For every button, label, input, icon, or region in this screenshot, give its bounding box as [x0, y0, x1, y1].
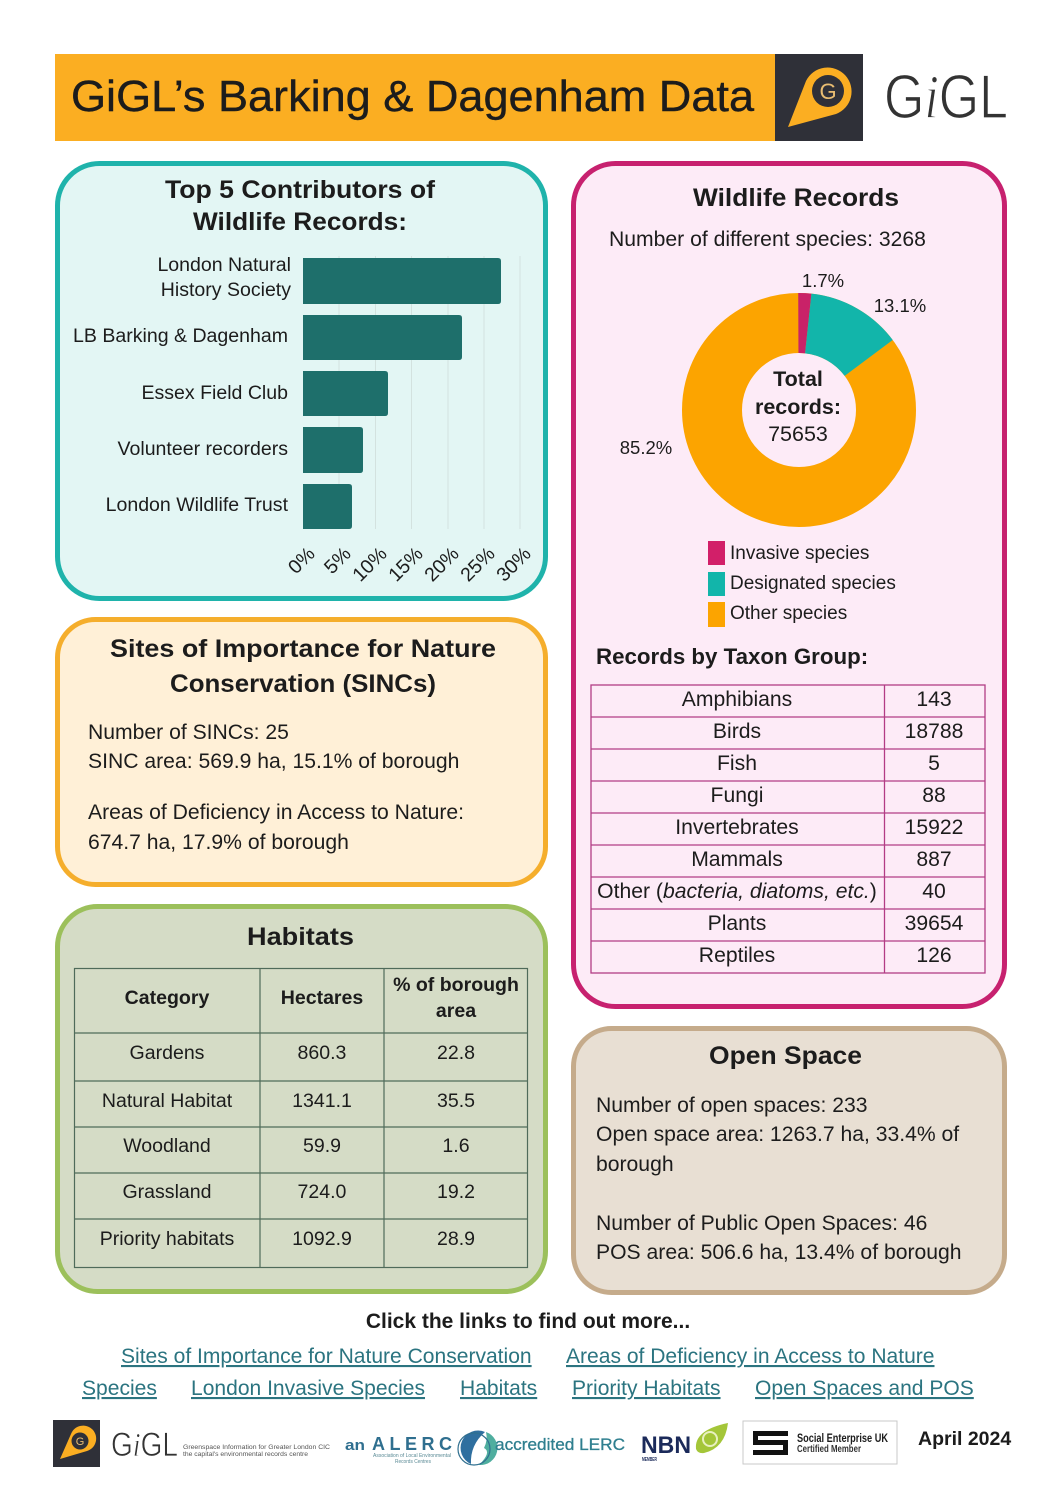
bar chart: contributors [73, 254, 536, 586]
logo: GiGL footer: G [76, 1436, 84, 1448]
panel: wildlife records [574, 164, 1004, 1006]
text: number of species: Number of different species: 3268 [609, 228, 926, 251]
text: SINC statistics [88, 721, 464, 854]
heading: SINCs: Conservation (SINCs) [170, 670, 436, 698]
bar chart: contributors: 20% [420, 543, 464, 586]
donut chart: records by species type: 13.1% [874, 295, 926, 316]
table: habitats: Hectares [281, 987, 363, 1009]
text: SINC statistics: SINC area: 569.9 ha, 15.1% of borough [88, 750, 459, 773]
logo: GiGL pin icon: G [819, 79, 837, 104]
bar chart: contributors: 5% [320, 543, 356, 579]
table: habitats: 19.2 [437, 1181, 475, 1203]
logo: Social Enterprise UK: Social Enterprise UK [797, 1431, 888, 1445]
links: Sites of Importance for Nature Conservation [121, 1345, 532, 1368]
bar chart: contributors: LB Barking & Dagenham [73, 325, 288, 347]
links: Species [82, 1377, 157, 1400]
panel: open space [574, 1028, 1004, 1292]
bar chart: contributors: 10% [348, 543, 392, 586]
table: taxon group records: 88 [922, 784, 946, 807]
logo: ALERC accredited LERC: Records Centres [395, 1459, 431, 1465]
heading: SINCs: Sites of Importance for Nature [110, 635, 496, 663]
legend: species types [708, 541, 896, 627]
logo: ALERC accredited LERC [345, 1431, 625, 1465]
footer logos [53, 1420, 897, 1467]
links: Priority Habitats [572, 1377, 721, 1400]
text: SINC statistics: Areas of Deficiency in Access to Nature: [88, 801, 464, 824]
legend: species types: Other species [730, 603, 847, 624]
table: taxon group records: 40 [922, 880, 946, 903]
heading: top 5 contributors: Top 5 Contributors of [165, 176, 436, 204]
table: habitats: 724.0 [298, 1181, 347, 1203]
table: taxon group records: 15922 [905, 816, 963, 839]
links: Habitats [460, 1377, 537, 1400]
table: taxon group records: 126 [916, 944, 952, 967]
logo: NBN member: NBN [641, 1432, 691, 1459]
bar chart: contributors: Volunteer recorders [118, 438, 288, 460]
table: habitats: Woodland [123, 1135, 211, 1157]
links heading: Click the links to find out more... [366, 1310, 690, 1333]
logo: GiGL pin icon [775, 54, 863, 141]
table: taxon group records [591, 685, 985, 973]
donut chart: records by species type: 1.7% [802, 270, 844, 291]
table: habitats: 35.5 [437, 1090, 475, 1112]
table: taxon group records: Fish [717, 752, 757, 775]
heading: top 5 contributors: Wildlife Records: [193, 208, 407, 236]
donut chart: records by species type: records: [755, 395, 841, 419]
bar chart: contributors: London Natural [157, 254, 291, 276]
table: habitats [74, 968, 528, 1268]
text: open space statistics: Number of Public Open Spaces: 46 [596, 1212, 927, 1235]
table: habitats: 860.3 [298, 1042, 346, 1064]
table: habitats: area [436, 1000, 476, 1022]
links: Open Spaces and POS [755, 1377, 974, 1400]
table: habitats: 28.9 [437, 1228, 475, 1250]
header banner [55, 54, 1008, 141]
logo: GiGL footer [53, 1420, 330, 1467]
table: habitats: Priority habitats [100, 1228, 235, 1250]
table: taxon group records: 5 [928, 752, 940, 775]
table: habitats: 59.9 [303, 1135, 341, 1157]
table: habitats: 1341.1 [292, 1090, 352, 1112]
links [82, 1345, 974, 1400]
donut chart: records by species type: 75653 [768, 422, 828, 446]
legend: species types: Invasive species [730, 543, 869, 564]
table: taxon group records: 143 [916, 688, 952, 711]
logo: ALERC accredited LERC: Association of Local Environmental [373, 1453, 451, 1459]
heading: records by taxon group: Records by Taxon Group: [596, 644, 868, 669]
heading: wildlife records: Wildlife Records [693, 184, 899, 212]
panel: SINCs [58, 620, 546, 884]
bar chart: contributors: London Wildlife Trust [106, 494, 289, 516]
table: taxon group records: Birds [713, 720, 761, 743]
logo: Social Enterprise UK [743, 1421, 897, 1464]
legend: species types: Designated species [730, 573, 896, 594]
table: taxon group records: Plants [708, 912, 766, 935]
logo: NBN member [641, 1423, 728, 1463]
logo: ALERC accredited LERC: accredited LERC [495, 1435, 625, 1454]
date: April 2024 [918, 1428, 1011, 1450]
logo: ALERC accredited LERC: ALERC [372, 1434, 452, 1454]
heading: habitats: Habitats [247, 923, 354, 951]
logo: Social Enterprise UK: Certified Member [797, 1444, 861, 1455]
bar chart: contributors: History Society [161, 279, 291, 301]
table: habitats: 22.8 [437, 1042, 475, 1064]
text: open space statistics: POS area: 506.6 ha, 13.4% of borough [596, 1241, 962, 1264]
table: habitats: Natural Habitat [102, 1090, 233, 1112]
heading: open space: Open Space [709, 1042, 862, 1070]
links: Areas of Deficiency in Access to Nature [566, 1345, 934, 1368]
table: taxon group records: 39654 [905, 912, 964, 935]
bar chart: contributors: Essex Field Club [141, 382, 288, 404]
bar chart: contributors: 0% [284, 543, 320, 579]
table: taxon group records: Amphibians [682, 688, 792, 711]
donut chart: records by species type: 85.2% [620, 437, 672, 458]
text: SINC statistics: 674.7 ha, 17.9% of borough [88, 831, 349, 854]
table: habitats: Grassland [122, 1181, 212, 1203]
panel: top 5 contributors [58, 164, 546, 598]
table: taxon group records: Reptiles [699, 944, 775, 967]
bar chart: contributors: 30% [492, 543, 536, 586]
table: habitats: 1.6 [442, 1135, 470, 1157]
table: habitats: 1092.9 [292, 1228, 352, 1250]
table: habitats: % of borough [393, 974, 519, 996]
text: SINC statistics: Number of SINCs: 25 [88, 721, 289, 744]
logo: ALERC accredited LERC: an [345, 1437, 365, 1454]
heading: top 5 contributors [165, 176, 436, 236]
table: taxon group records: Invertebrates [675, 816, 799, 839]
table: taxon group records: 18788 [905, 720, 963, 743]
table: taxon group records: Fungi [711, 784, 763, 807]
logo: GiGL footer: the capital's environmental records centre [183, 1451, 308, 1458]
logo: NBN member: MEMBER [642, 1457, 657, 1463]
bar chart: contributors: 25% [456, 543, 500, 586]
text: open space statistics: Number of open spaces: 233 [596, 1094, 867, 1117]
table: habitats: Category [125, 987, 209, 1009]
heading: SINCs [110, 635, 496, 698]
title: GiGL’s Barking & Dagenham Data [71, 72, 755, 121]
panel: habitats [58, 906, 546, 1292]
table: taxon group records: Other (bacteria, diatoms, etc.) [597, 880, 877, 903]
donut chart: records by species type: Total [773, 367, 823, 391]
text: open space statistics: Open space area: 1263.7 ha, 33.4% of [596, 1123, 959, 1146]
logo: GiGL footer: GiGL [111, 1426, 178, 1464]
text: open space statistics [596, 1094, 962, 1264]
donut chart: records by species type [620, 270, 926, 497]
table: taxon group records: Mammals [691, 848, 783, 871]
text: open space statistics: borough [596, 1153, 674, 1176]
table: habitats: Gardens [130, 1042, 205, 1064]
table: taxon group records: 887 [916, 848, 952, 871]
links: London Invasive Species [191, 1377, 425, 1400]
logo: GiGL footer: Greenspace Information for Greater London CIC [183, 1444, 330, 1451]
logo: GiGL wordmark: GiGL [884, 63, 1008, 132]
bar chart: contributors: 15% [384, 543, 428, 586]
